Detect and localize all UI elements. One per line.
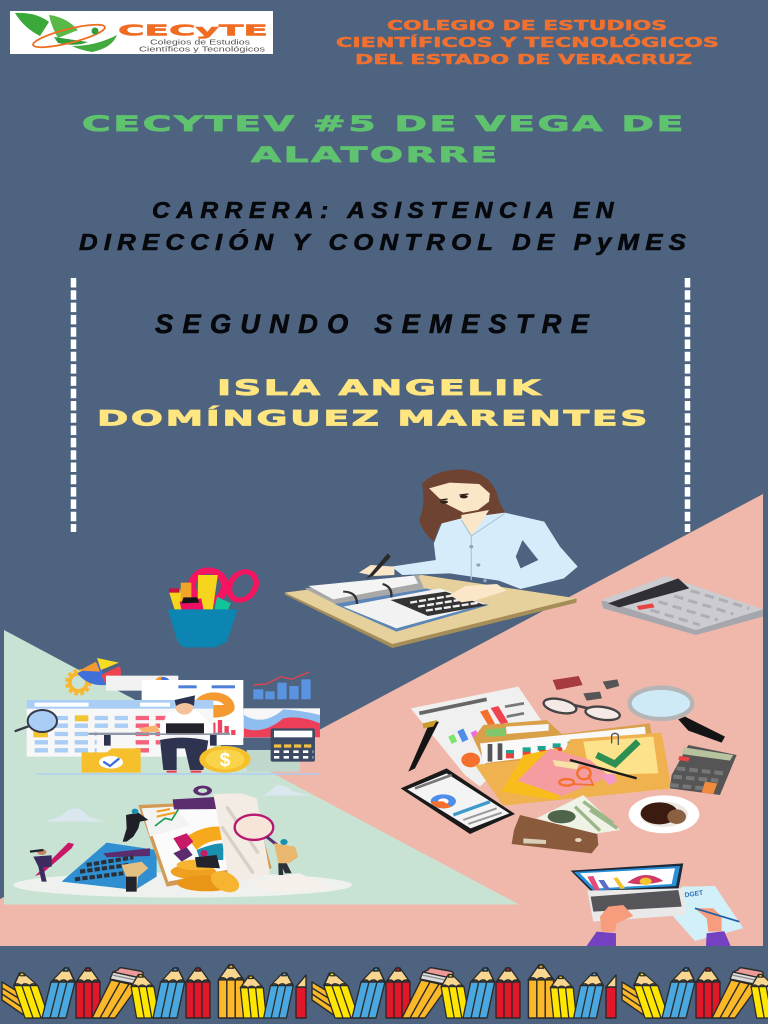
heading: semester: SEGUNDO SEMESTRE (155, 309, 598, 339)
author name: ISLA ANGELIK (217, 376, 543, 401)
pink background panel (0, 494, 763, 946)
heading: institution name: DEL ESTADO DE VERACRUZ (355, 53, 692, 68)
frame: left dashed line (71, 278, 76, 532)
title: school name (82, 112, 686, 168)
author name: DOMÍNGUEZ MARENTES (97, 406, 650, 432)
green triangle panel (4, 630, 519, 904)
border: row of pencils (2, 965, 768, 1018)
logo: CECyTE: CECyTE (118, 22, 268, 40)
icon: desk calculator (601, 576, 763, 635)
heading: institution name: CIENTÍFICOS Y TECNOLÓGICOS (336, 35, 719, 51)
logo: CECyTE: Científicos y Tecnológicos (139, 44, 265, 54)
logo: CECyTE: Colegios de Estudios (150, 38, 250, 46)
bottom band (0, 946, 768, 1024)
heading: institution name (336, 19, 719, 68)
heading: career: DIRECCIÓN Y CONTROL DE PyMES (79, 228, 692, 255)
heading: career (79, 197, 692, 255)
illustration: accounting scene with calculator and clipboard (13, 785, 352, 898)
author name (97, 376, 650, 432)
title: school name: ALATORRE (251, 143, 500, 168)
illustration: office supplies top view (401, 676, 743, 946)
illustration: finance dashboard: $ (220, 750, 231, 771)
frame: right dashed line (685, 278, 690, 532)
illustration: finance dashboard (15, 658, 320, 775)
right page edge (763, 490, 768, 946)
heading: career: CARRERA: ASISTENCIA EN (152, 197, 620, 223)
logo: CECyTE (10, 11, 273, 54)
icon: pencil pot with scissors (168, 568, 261, 647)
illustration: woman at desk (285, 469, 578, 648)
heading: institution name: COLEGIO DE ESTUDIOS (387, 19, 667, 34)
title: school name: CECYTEV #5 DE VEGA DE (82, 112, 686, 137)
illustration: office supplies top view: DGET (684, 890, 704, 899)
